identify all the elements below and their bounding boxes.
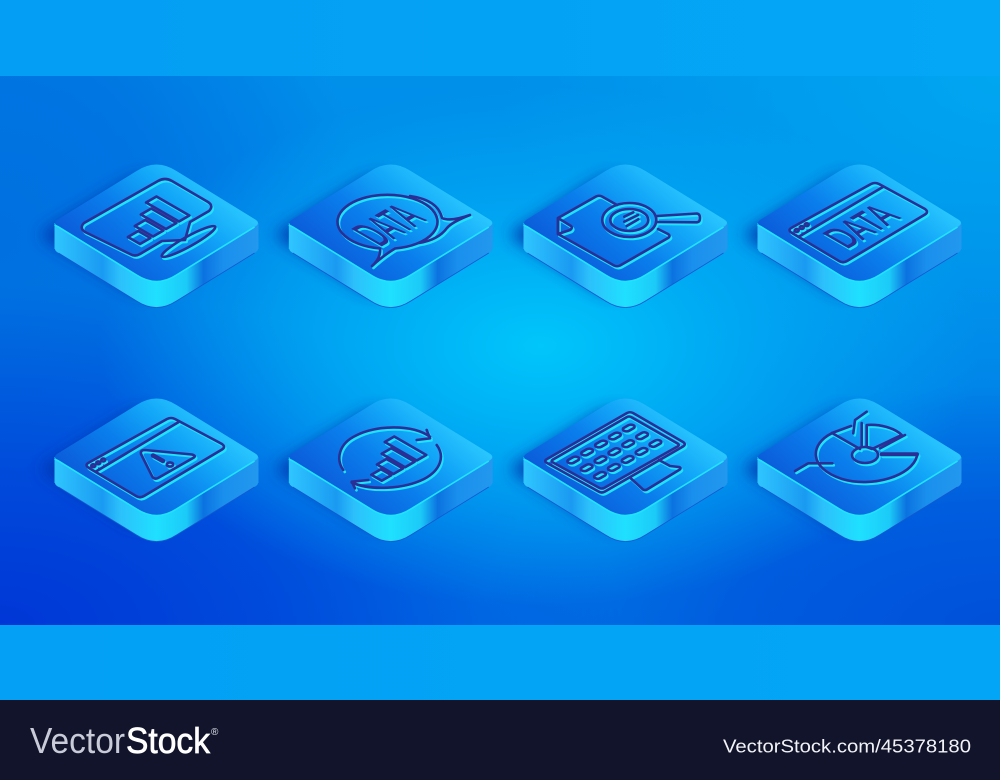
tile: bar chart speech bubble: [42, 164, 258, 308]
icon: speech bubbles with DATA: DATA: [341, 197, 437, 253]
icon: pie chart with callouts: [795, 412, 918, 484]
logo: VectorStock: ®: [211, 727, 219, 738]
tile base: [511, 398, 728, 542]
logo: VectorStock: Vector: [30, 720, 125, 761]
tile base: [745, 164, 962, 308]
logo: VectorStock: [30, 720, 219, 761]
logo: VectorStock: Stock: [126, 720, 211, 761]
tile base: [42, 164, 258, 308]
tile: refresh chart: [276, 398, 493, 542]
icon: speech bubbles with DATA: DATA: [343, 199, 438, 255]
tile base: [511, 164, 728, 308]
icon: document with magnifying glass: [558, 196, 702, 268]
icon: browser window with DATA: DATA: [815, 201, 912, 256]
tile: binary monitor: [511, 398, 728, 542]
tile base: [42, 398, 258, 542]
tile base: [276, 164, 493, 308]
icon: browser window with warning triangle: [86, 418, 226, 499]
tile base: [745, 398, 962, 542]
icon: browser window with DATA: [790, 183, 928, 264]
tile: browser warning: [42, 398, 258, 542]
tile: document search: [511, 164, 728, 308]
icon: speech bubbles with DATA: [338, 195, 472, 268]
tile base: [276, 398, 493, 542]
icon: bar chart speech bubble: [82, 179, 219, 263]
bottom light blue band: [0, 625, 1000, 700]
tile: data speech bubbles: [276, 164, 493, 308]
tile: data browser window: [745, 164, 962, 308]
tile: pie chart: [745, 398, 962, 542]
footer bar: [0, 700, 1000, 780]
icon: browser window with DATA: DATA: [814, 199, 910, 254]
top light blue band: [0, 0, 1000, 76]
icon: monitor with binary code: [545, 412, 686, 494]
icon: bar chart with refresh arrows: [339, 427, 442, 490]
image id text: VectorStock.com/45378180: [723, 736, 971, 756]
central blue gradient panel: [0, 76, 1000, 625]
